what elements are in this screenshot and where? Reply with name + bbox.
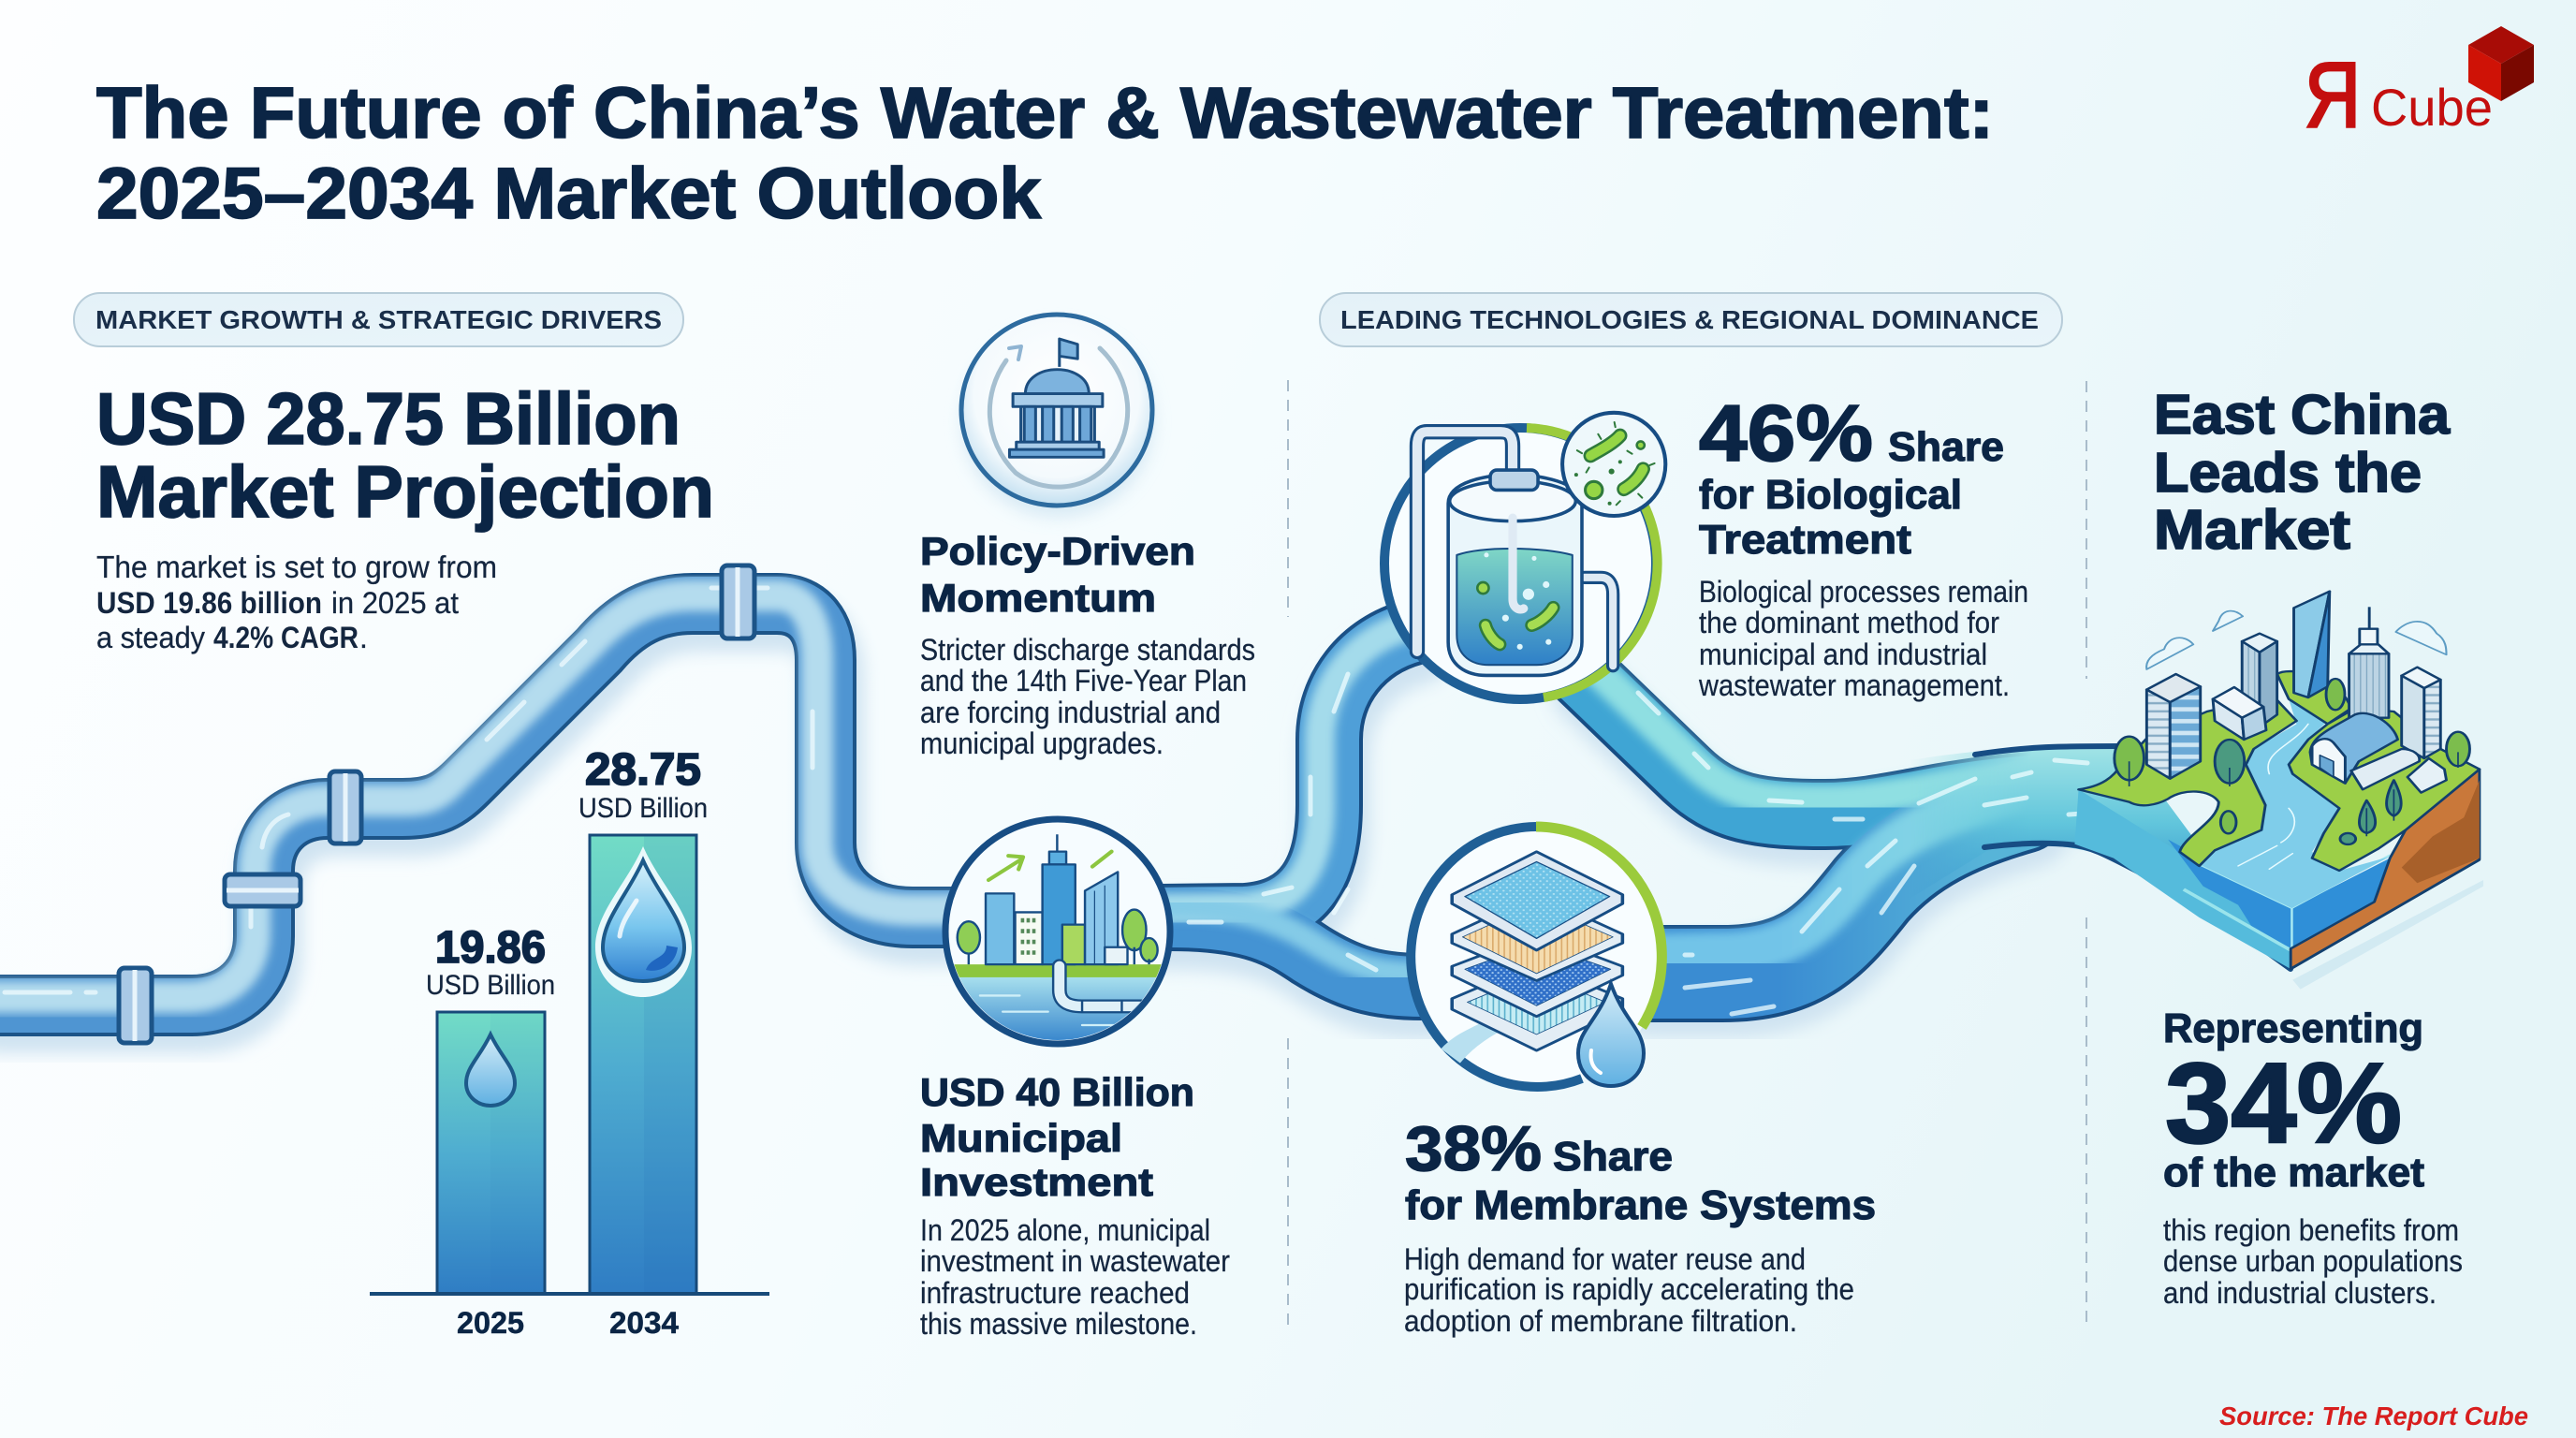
text: market growth description: . xyxy=(359,621,368,654)
logo: RCube xyxy=(2305,26,2534,146)
section pill: leading technologies xyxy=(1320,293,2062,346)
text: representing 34 percent: of the market xyxy=(2163,1150,2424,1196)
block: soil face xyxy=(2291,770,2480,969)
logo: RCube: Cube xyxy=(2371,78,2493,137)
text: policy-driven momentum xyxy=(920,529,1255,760)
text: biological treatment: wastewater management. xyxy=(1698,668,2010,702)
water streams: branches and confluence xyxy=(1161,625,2291,1014)
layer 2 xyxy=(1452,895,1622,981)
pipe flanges xyxy=(119,565,754,1043)
confluence xyxy=(1917,749,2191,852)
text: biological treatment: Treatment xyxy=(1699,517,1911,563)
layer 1 xyxy=(1452,852,1622,950)
heading: east china xyxy=(2154,384,2451,561)
bar labels: 2025 xyxy=(457,1306,524,1340)
text: representing 34 percent xyxy=(2163,1005,2463,1310)
text: market growth description: a steady xyxy=(96,621,205,654)
source note: Source: The Report Cube xyxy=(2219,1401,2528,1431)
text: policy-driven momentum: Policy-Driven xyxy=(920,529,1195,573)
layer 4 xyxy=(1452,962,1622,1050)
text: municipal investment: Municipal xyxy=(920,1116,1122,1160)
bar chart: market size xyxy=(370,745,769,1340)
pipeline: left section xyxy=(0,565,962,1043)
bar labels: 2034 xyxy=(609,1306,679,1340)
text: biological treatment: for Biological xyxy=(1699,472,1962,518)
text: biological treatment: municipal and industrial xyxy=(1699,638,1987,671)
bar 2034 xyxy=(590,835,696,1294)
text: policy-driven momentum: are forcing industrial and xyxy=(920,696,1221,729)
illustration: east china isometric city xyxy=(2074,592,2483,990)
bar 2025 xyxy=(437,1012,545,1294)
text: representing 34 percent: 34% xyxy=(2165,1039,2402,1167)
text: membrane systems: Share xyxy=(1553,1134,1673,1180)
layer 3 xyxy=(1452,934,1622,1017)
heading: market projection: Market Projection xyxy=(96,450,714,533)
bar labels: 28.75 xyxy=(585,745,701,795)
block: water face xyxy=(2074,789,2390,969)
text: biological treatment: Biological processes remain xyxy=(1699,575,2028,609)
icon: biological reactor xyxy=(1384,413,1665,699)
logo: RCube: Я xyxy=(2305,43,2361,146)
text: municipal investment: Investment xyxy=(920,1160,1153,1204)
filtered water channel xyxy=(1441,1017,1508,1064)
text: membrane systems xyxy=(1404,1113,1876,1338)
section pill: leading technologies: LEADING TECHNOLOGIES & REGIONAL DOMINANCE xyxy=(1340,305,2039,334)
text: biological treatment: 46% xyxy=(1699,389,1873,478)
text: market growth description: in 2025 at xyxy=(331,586,459,620)
buildings xyxy=(2146,592,2447,793)
title xyxy=(96,73,1994,234)
section pill: market growth xyxy=(74,293,683,346)
text: biological treatment xyxy=(1698,389,2028,702)
text: membrane systems: purification is rapidly accelerating the xyxy=(1404,1272,1854,1306)
icon: policy building xyxy=(961,315,1153,517)
text: municipal investment: infrastructure reached xyxy=(920,1276,1190,1310)
text: biological treatment: Share xyxy=(1888,424,2004,470)
icon: small droplet xyxy=(466,1034,515,1106)
text: municipal investment xyxy=(920,1070,1230,1341)
text: representing 34 percent: this region benefits from xyxy=(2163,1213,2459,1247)
clouds xyxy=(2146,638,2193,669)
trees xyxy=(2115,679,2469,833)
icon: municipal city xyxy=(941,819,1178,1047)
text: representing 34 percent: dense urban populations xyxy=(2163,1244,2463,1278)
heading: east china: Market xyxy=(2154,499,2350,561)
text: policy-driven momentum: Momentum xyxy=(920,576,1156,620)
title: 2025–2034 Market Outlook xyxy=(96,154,1041,234)
bar labels: USD Billion xyxy=(426,970,555,1001)
text: municipal investment: this massive milestone. xyxy=(920,1307,1197,1341)
text: biological treatment: the dominant method for xyxy=(1699,606,1999,639)
heading: east china: Leads the xyxy=(2154,442,2422,504)
heading: market projection: USD 28.75 Billion xyxy=(96,377,681,460)
land xyxy=(2079,671,2480,871)
icon: membrane stack xyxy=(1410,827,1662,1087)
icon: large droplet xyxy=(595,846,692,997)
heading: east china: East China xyxy=(2154,384,2451,446)
title: The Future of China’s Water & Wastewater Treatment: xyxy=(96,73,1994,154)
bar labels: USD Billion xyxy=(578,793,708,824)
text: market growth description: The market is set to grow from xyxy=(96,550,497,584)
text: membrane systems: for Membrane Systems xyxy=(1405,1182,1876,1228)
heading: market projection xyxy=(96,377,714,533)
text: municipal investment: USD 40 Billion xyxy=(920,1070,1194,1114)
text: market growth description xyxy=(96,550,497,654)
text: membrane systems: High demand for water reuse and xyxy=(1404,1242,1806,1276)
text: representing 34 percent: and industrial clusters. xyxy=(2163,1276,2437,1310)
bar labels xyxy=(426,745,708,1340)
text: municipal investment: In 2025 alone, municipal xyxy=(920,1213,1210,1247)
text: municipal investment: investment in wastewater xyxy=(920,1244,1230,1278)
text: membrane systems: 38% xyxy=(1405,1113,1542,1184)
text: policy-driven momentum: municipal upgrades. xyxy=(920,726,1164,760)
text: membrane systems: adoption of membrane filtration. xyxy=(1404,1304,1797,1338)
text: policy-driven momentum: and the 14th Five-Year Plan xyxy=(920,664,1247,697)
text: market growth description: 4.2% CAGR xyxy=(213,621,359,654)
text: policy-driven momentum: Stricter discharge standards xyxy=(920,633,1255,667)
section pill: market growth: MARKET GROWTH & STRATEGIC DRIVERS xyxy=(95,305,662,334)
text: market growth description: USD 19.86 billion xyxy=(96,586,322,620)
text: representing 34 percent: Representing xyxy=(2163,1005,2423,1051)
bacteria bubble xyxy=(1562,413,1665,516)
bar labels: 19.86 xyxy=(435,923,546,973)
river on top of block xyxy=(2199,699,2390,908)
